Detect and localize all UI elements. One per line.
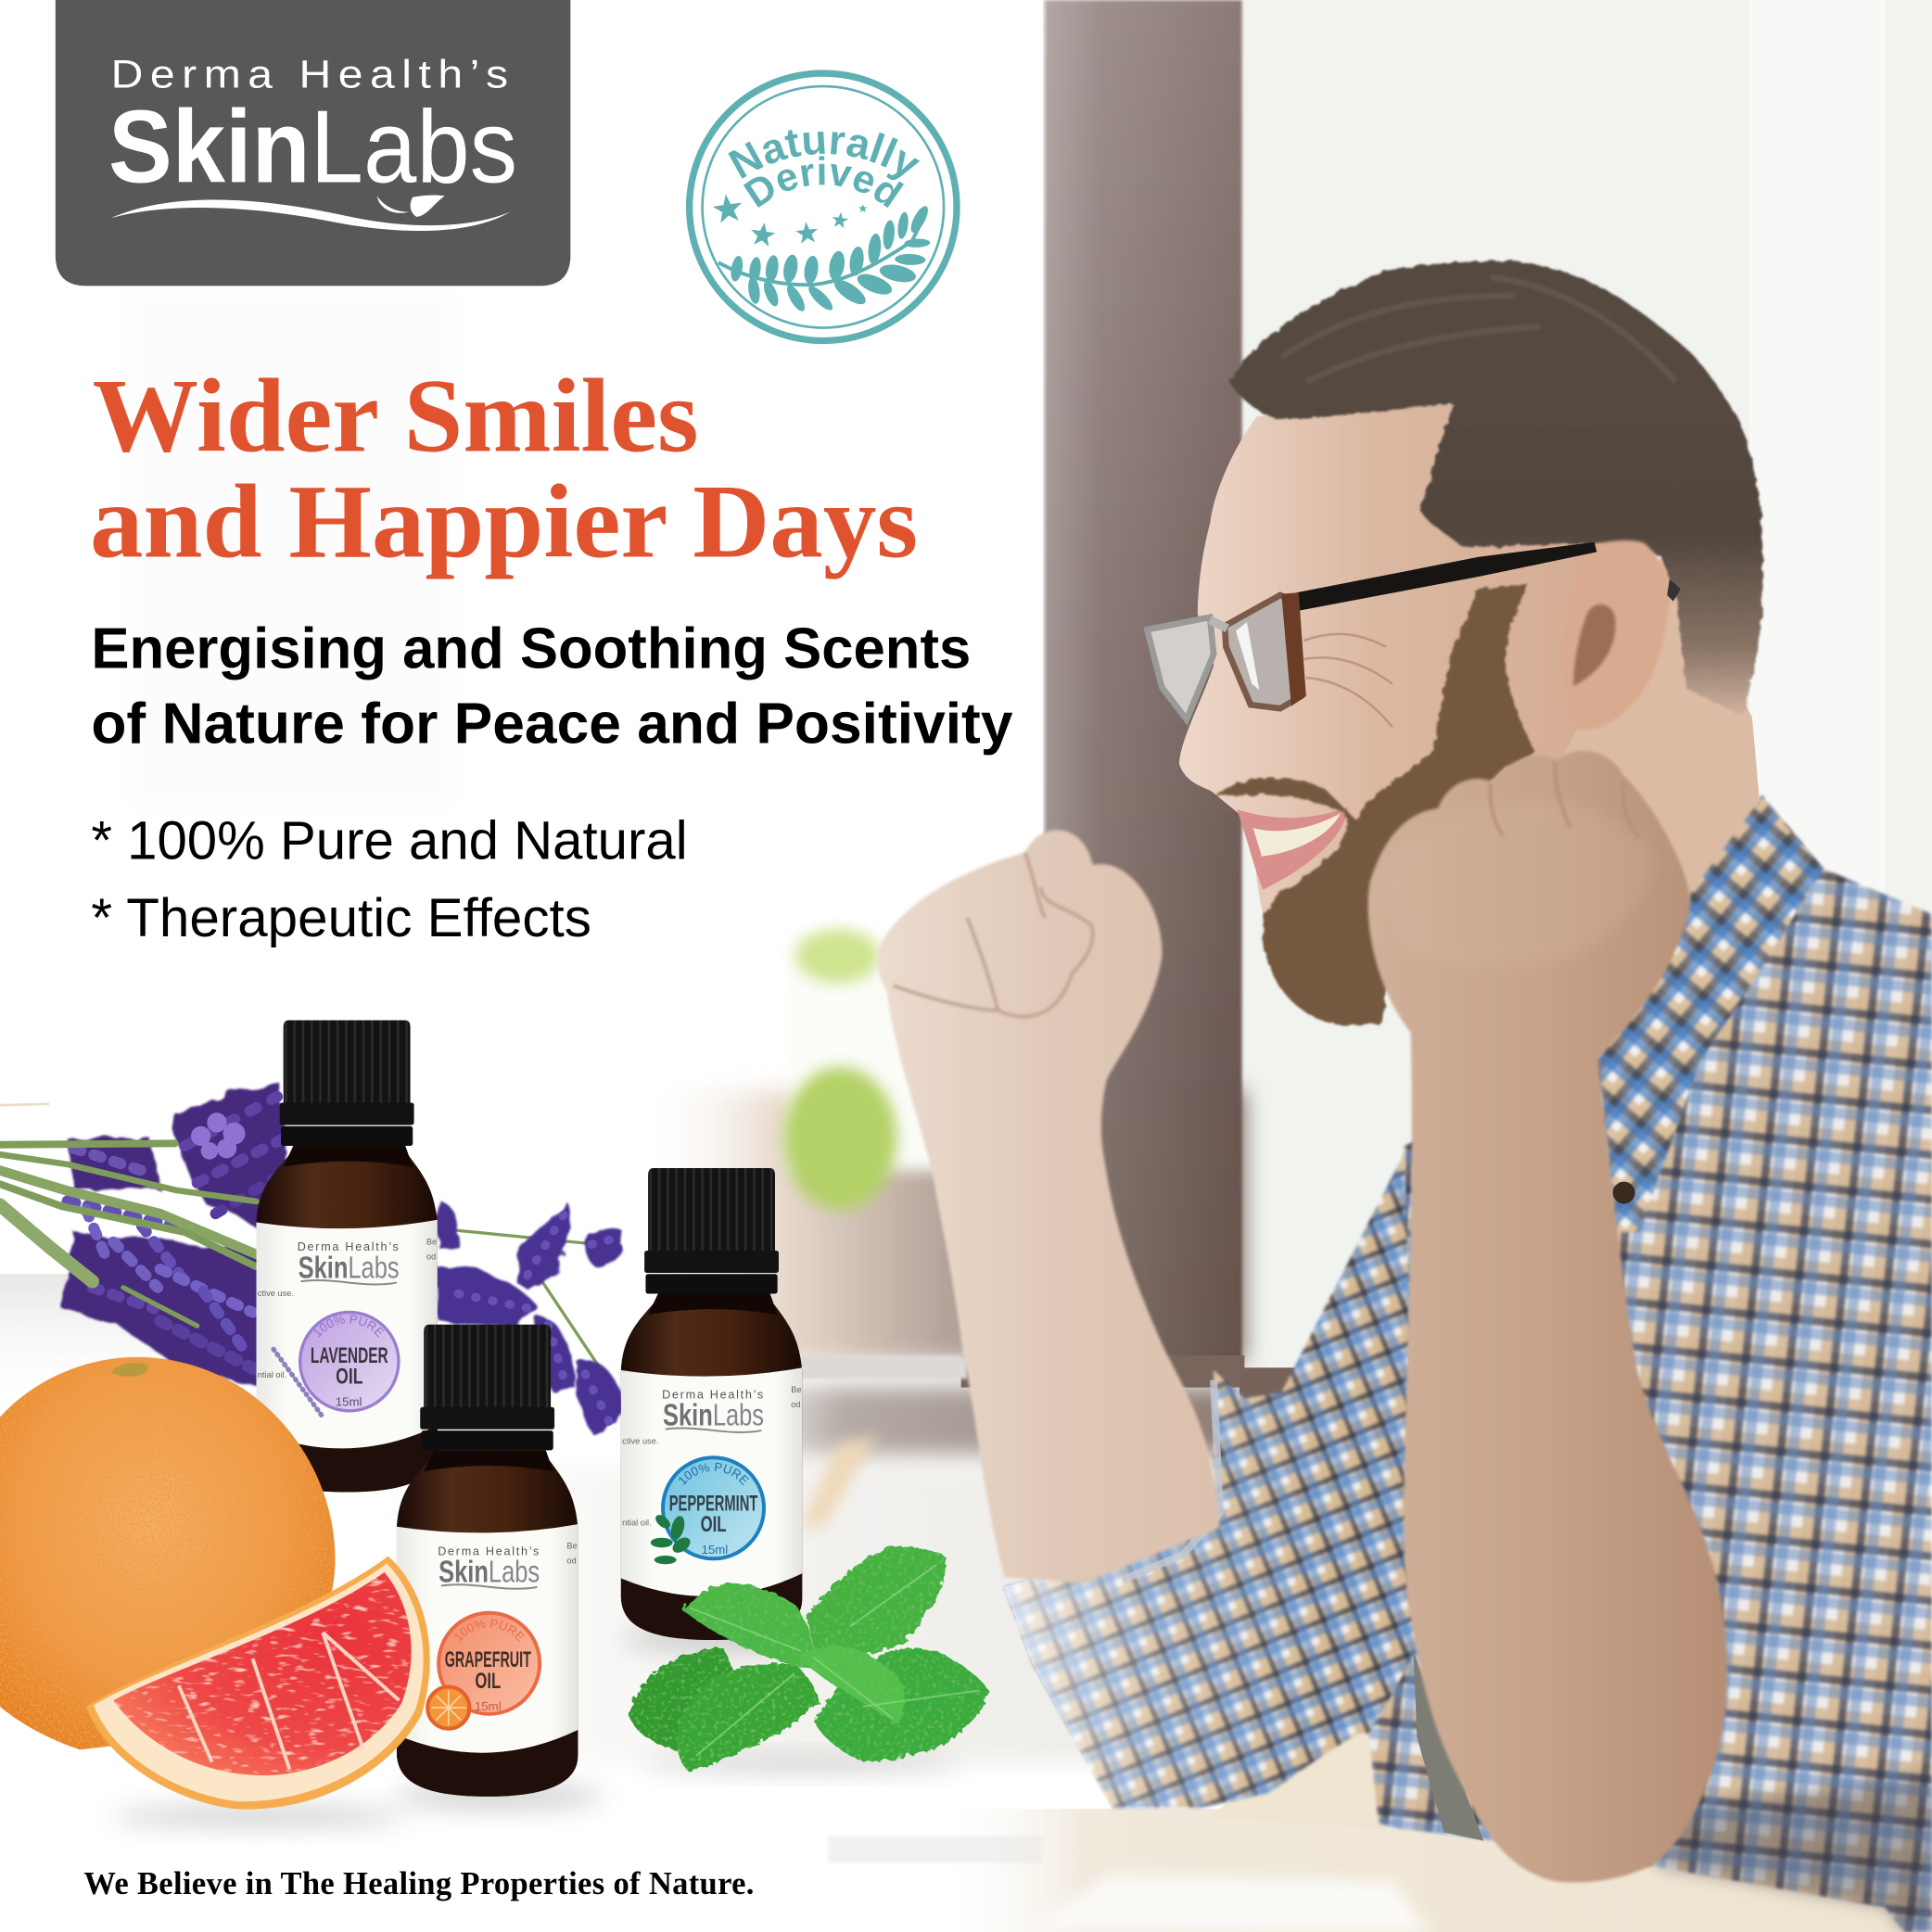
bottle: lavender oil: 100% PURE — [313, 1315, 385, 1338]
bullet list: * Therapeutic Effects — [91, 888, 591, 948]
label fine print: ctive use. — [258, 1289, 294, 1298]
bottle: lavender oil: LAVENDER — [311, 1343, 388, 1368]
mouth — [1237, 807, 1348, 890]
bullet list: * 100% Pure and Natural — [91, 810, 688, 871]
centre leaf — [794, 1645, 903, 1723]
label fine print: Be — [566, 1542, 578, 1551]
bottle: peppermint oil: 15ml — [701, 1543, 728, 1557]
bottle: grapefruit oil: OIL — [475, 1669, 501, 1694]
tagline: We Believe in The Healing Properties of Nature. — [83, 1866, 754, 1901]
mint sprig — [628, 1544, 988, 1771]
stems — [0, 1143, 256, 1326]
heading: and Happier Days — [90, 464, 918, 580]
logo swoosh and leaf — [111, 195, 510, 231]
bottle: grapefruit oil: 15ml — [475, 1699, 502, 1713]
teeth — [1253, 813, 1341, 857]
oil circle — [300, 1312, 399, 1411]
logo panel — [56, 0, 570, 286]
oil circle — [439, 1613, 540, 1714]
shirt button — [1613, 1182, 1635, 1204]
badge laurel branch — [718, 204, 932, 313]
label fine print — [258, 1237, 437, 1379]
bullet list — [91, 810, 688, 948]
whole grapefruit — [0, 1357, 336, 1749]
sleeve fade — [1004, 1355, 1325, 1808]
neck — [1454, 554, 1760, 1060]
logo: Derma Health's: Derma Health’s — [111, 52, 515, 96]
bottle: grapefruit oil: SkinLabs — [439, 1556, 540, 1590]
mint veins — [690, 1565, 980, 1756]
moustache and beard — [1213, 584, 1535, 1026]
grapefruit slice — [86, 1557, 430, 1810]
sprig florets — [458, 1214, 616, 1423]
shirt far sleeve — [1004, 1152, 1417, 1808]
top left leaf — [680, 1581, 819, 1670]
badge text: Naturally: Naturally — [728, 130, 920, 180]
label fine print: ntial oil. — [258, 1370, 286, 1379]
lavender sprigs right of bottle — [438, 1198, 624, 1436]
undershirt — [1413, 1651, 1483, 1841]
bottle: peppermint oil: OIL — [701, 1512, 726, 1537]
temple arm — [1296, 542, 1596, 611]
photo: smiling man with raised fists — [877, 261, 1932, 1932]
glasses — [1147, 542, 1681, 719]
bottle: lavender oil: 15ml — [336, 1394, 362, 1408]
oil circle — [663, 1457, 764, 1558]
sprig stems — [438, 1228, 622, 1392]
shadow on lower shirt — [1656, 1774, 1932, 1932]
bottle: peppermint oil — [621, 1168, 803, 1640]
label fine print: Be — [791, 1385, 802, 1394]
label fine print: od — [791, 1400, 801, 1409]
subheading: Energising and Soothing Scents — [91, 616, 971, 680]
right lens — [1225, 595, 1302, 708]
bottle: grapefruit oil — [397, 1324, 578, 1797]
back left leaf — [628, 1646, 739, 1749]
front left leaf — [674, 1662, 819, 1771]
badge text: Derived: Derived — [744, 156, 904, 208]
mint sprig icon — [651, 1512, 693, 1564]
logo: SkinLabs: SkinLabs — [108, 89, 517, 205]
segment membranes — [179, 1633, 400, 1770]
subheading — [91, 616, 1013, 756]
bottle: grapefruit oil: Derma Health’s — [438, 1544, 540, 1557]
bottle: peppermint oil: PEPPERMINT — [669, 1491, 758, 1516]
near fist knuckles — [1491, 761, 1639, 838]
heading — [90, 358, 918, 580]
label fine print: Be — [426, 1237, 437, 1246]
lavender bunch behind bottle — [0, 1085, 286, 1388]
label fine print — [622, 1385, 802, 1527]
bottle: peppermint oil: SkinLabs — [663, 1399, 764, 1433]
bottle: lavender oil: OIL — [336, 1365, 362, 1390]
bridge — [1210, 620, 1227, 629]
bottle: grapefruit oil: 100% PURE — [454, 1619, 525, 1642]
shirt torso — [1369, 794, 1932, 1932]
heading: Wider Smiles — [93, 358, 699, 474]
label fine print: od — [426, 1252, 436, 1261]
bottle: lavender oil: SkinLabs — [299, 1251, 400, 1285]
twine — [0, 1104, 49, 1105]
bottle: peppermint oil: Derma Health’s — [662, 1389, 765, 1402]
sleeve cuff edge — [1123, 1380, 1220, 1580]
collar — [1598, 797, 1824, 1232]
citrus icon — [427, 1687, 469, 1729]
top right leaf — [805, 1544, 945, 1658]
near fist highlights — [1387, 801, 1652, 967]
right leaf — [812, 1646, 988, 1760]
subheading: of Nature for Peace and Positivity — [91, 691, 1013, 756]
soft bottle shadows — [111, 1626, 961, 1826]
label fine print: od — [566, 1557, 577, 1566]
left lens — [1147, 617, 1214, 719]
inner ear — [1573, 604, 1616, 686]
far fist finger creases — [894, 853, 1093, 1017]
florets — [68, 1097, 281, 1370]
badge: Naturally Derived stamp — [686, 70, 960, 345]
cheek crow's feet — [1303, 634, 1392, 727]
head skin — [1179, 404, 1651, 1016]
label fine print: ntial oil. — [622, 1518, 652, 1527]
ear — [1561, 540, 1671, 731]
hair top highlights — [1281, 277, 1676, 382]
badge stars — [711, 192, 868, 248]
bottle: grapefruit oil: GRAPEFRUIT — [445, 1647, 531, 1672]
label fine print — [566, 1542, 578, 1566]
far arm and fist — [877, 830, 1220, 1583]
near forearm and fist — [1368, 751, 1727, 1883]
sprig heads — [438, 1198, 624, 1436]
label fine print: ctive use. — [622, 1437, 658, 1446]
label brand: Derma Health’s — [298, 1240, 400, 1253]
bottle: lavender oil — [256, 1020, 438, 1493]
dark flower masses — [61, 1085, 286, 1388]
hair — [1229, 261, 1762, 718]
stem — [111, 1363, 148, 1377]
open flower — [191, 1112, 245, 1160]
bottle: peppermint oil: 100% PURE — [679, 1463, 749, 1485]
